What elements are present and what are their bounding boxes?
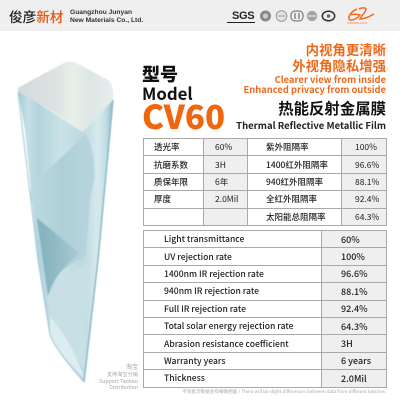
certification: SGS bbox=[227, 11, 255, 23]
spec table english: 2.0Mil bbox=[341, 372, 367, 385]
slogan chinese: 外视角隐私增强 bbox=[292, 54, 386, 74]
spec table english: Abrasion resistance coefficient bbox=[164, 338, 289, 350]
product name english: Thermal Reflective Metallic Film bbox=[236, 118, 386, 132]
left edge highlight bbox=[18, 92, 84, 382]
spec table english: 88.1% bbox=[341, 285, 368, 298]
slogan english: Clearer view from inside bbox=[275, 72, 386, 86]
company english name: New Materials Co., Ltd. bbox=[70, 16, 143, 24]
company english name bbox=[70, 8, 143, 24]
distribution note bbox=[99, 362, 138, 391]
spec table english: Full IR rejection rate bbox=[164, 303, 246, 315]
spec table english: 92.4% bbox=[341, 302, 368, 315]
spec table chinese: 6年 bbox=[215, 176, 228, 188]
spec table chinese bbox=[143, 138, 387, 226]
spec table chinese: 3H bbox=[215, 159, 226, 171]
company english name: Guangzhou Junyan bbox=[70, 8, 132, 16]
spec table chinese: 紫外阻隔率 bbox=[266, 141, 309, 153]
company logo wordmark: 俊彦新材 bbox=[9, 6, 63, 26]
darker lower fold bbox=[30, 134, 95, 290]
slogan bbox=[244, 39, 386, 96]
certification: SGS: SGS bbox=[232, 10, 254, 22]
pale tip fold bbox=[50, 317, 84, 378]
spec table english: 3H bbox=[341, 337, 353, 350]
spec table english: Thickness bbox=[164, 372, 205, 384]
spec table chinese: 全红外阻隔率 bbox=[266, 193, 317, 205]
distribution note: 淘宝 bbox=[126, 362, 138, 371]
spec table english: 6 years bbox=[341, 354, 371, 367]
right edge highlight bbox=[84, 100, 113, 382]
spec table english: 64.3% bbox=[341, 320, 368, 333]
spec table english: 100% bbox=[341, 250, 365, 263]
certification badges bbox=[260, 10, 336, 22]
spec table chinese: 抗磨系数 bbox=[154, 159, 188, 171]
spec table english: Warranty years bbox=[164, 355, 225, 367]
film body bbox=[18, 90, 113, 382]
distribution note: Support Taobao bbox=[99, 378, 138, 385]
model label chinese: 型号 bbox=[142, 61, 178, 87]
slogan english bbox=[244, 72, 386, 96]
spec table english bbox=[143, 230, 387, 388]
film roll illustration bbox=[17, 61, 114, 383]
spec table english: UV rejection rate bbox=[164, 251, 232, 263]
slogan english: Enhanced privacy from outside bbox=[244, 82, 386, 96]
header band bbox=[0, 0, 400, 31]
spec table chinese: 透光率 bbox=[154, 141, 180, 153]
spec table english: Light transmittance bbox=[164, 233, 244, 245]
model label english: Model bbox=[142, 81, 193, 105]
spec table chinese: 100% bbox=[355, 141, 377, 153]
middle lower fold bbox=[47, 263, 87, 370]
spec table chinese: 1400红外阻隔率 bbox=[266, 159, 328, 171]
spec table chinese: 60% bbox=[215, 141, 232, 153]
spec table chinese: 质保年限 bbox=[154, 176, 188, 188]
spec table english: 60% bbox=[341, 233, 360, 246]
top opening bbox=[18, 61, 113, 132]
icon: Alibaba logo bbox=[347, 7, 374, 25]
spec table english: 940nm IR rejection rate bbox=[164, 285, 259, 297]
distribution note: 支持淘宝分销 bbox=[107, 371, 138, 378]
footnote: 不同批次数据会有细微相差 / There will be slight differences between data from different batches. bbox=[182, 389, 386, 395]
spec table chinese: 厚度 bbox=[154, 193, 171, 205]
spec table chinese: 940红外阻隔率 bbox=[266, 176, 323, 188]
spec table chinese: 96.6% bbox=[355, 159, 379, 171]
icon: Alibaba logo: Alibaba.com bbox=[347, 21, 367, 25]
spec table chinese: 2.0Mil bbox=[215, 193, 238, 205]
slogan chinese: 内视角更清晰 bbox=[306, 39, 386, 59]
spec table english: 96.6% bbox=[341, 267, 368, 280]
spec table chinese: 64.3% bbox=[355, 211, 379, 223]
model number: CV60 bbox=[142, 90, 225, 138]
spec table chinese: 88.1% bbox=[355, 176, 379, 188]
spec table english: Total solar energy rejection rate bbox=[164, 320, 294, 332]
product name chinese: 热能反射金属膜 bbox=[278, 97, 386, 119]
slogan chinese bbox=[292, 39, 386, 74]
spec table chinese: 92.4% bbox=[355, 193, 379, 205]
spec table chinese: 太阳能总阻隔率 bbox=[266, 211, 326, 223]
spec table english: 1400nm IR rejection rate bbox=[164, 268, 264, 280]
shadow fold bbox=[37, 218, 79, 297]
distribution note: Distribution bbox=[109, 384, 138, 391]
